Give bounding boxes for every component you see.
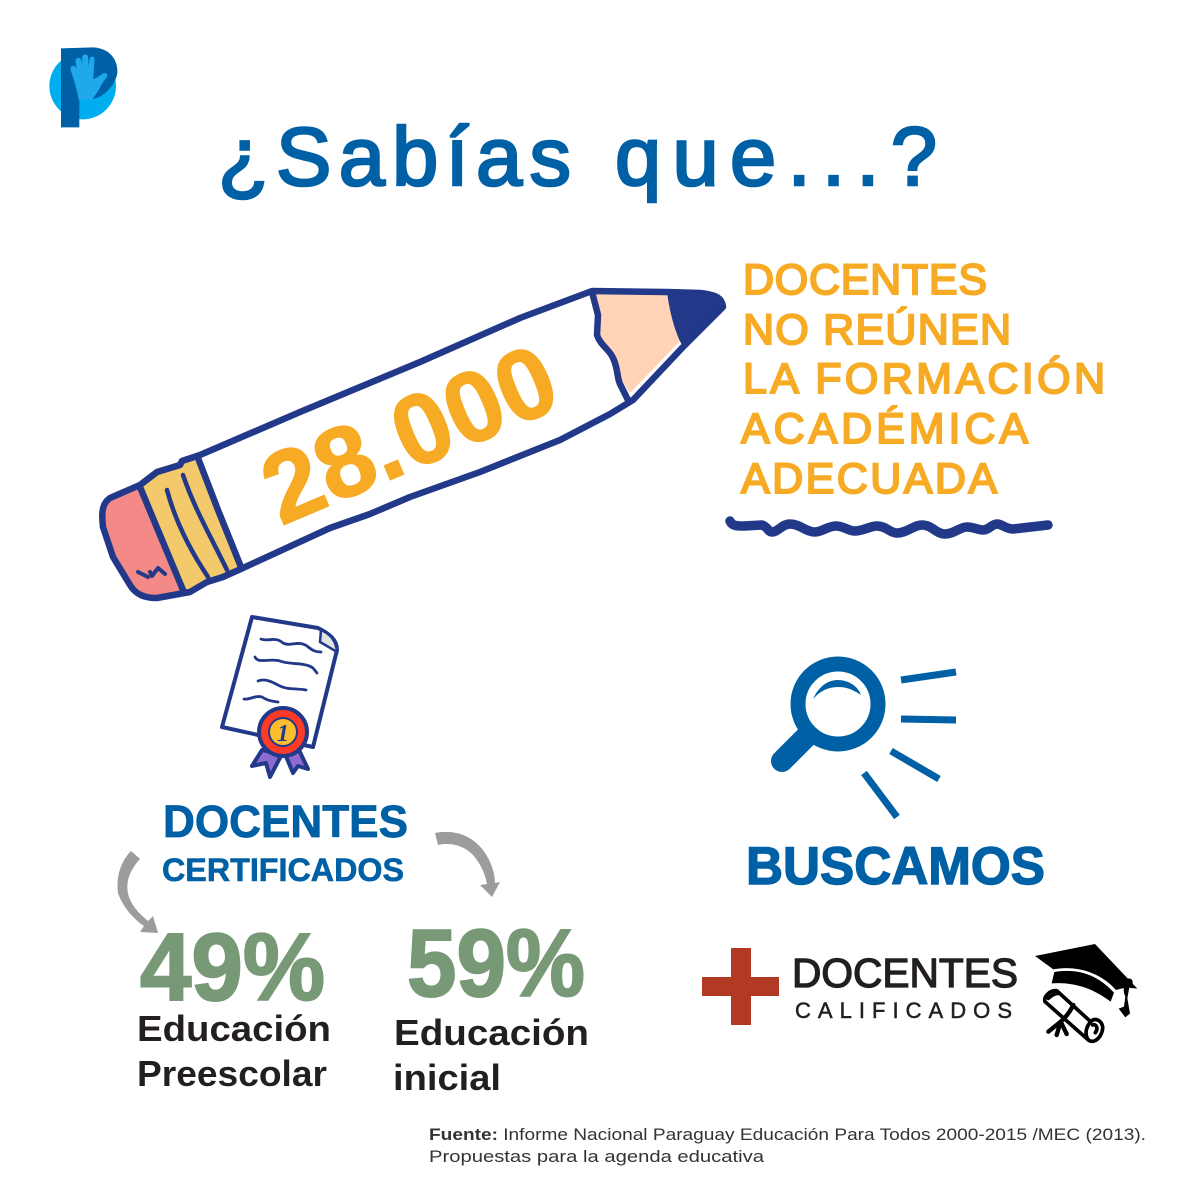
- icon: red plus: [702, 948, 779, 1025]
- pencil lead: [667, 291, 723, 347]
- heading: docentes no reúnen la formación académica adecuada: ACADÉMICA: [741, 405, 1028, 453]
- source note: Propuestas para la agenda educativa: [429, 1148, 765, 1166]
- cap: [1035, 944, 1137, 990]
- metal ferrule: [140, 458, 241, 592]
- pencil outline: [102, 291, 723, 598]
- arrow: to 49%: [118, 851, 158, 933]
- heading: docentes no reúnen la formación académica adecuada: LA FORMACIÓN: [743, 355, 1105, 403]
- heading: docentes certificados: [162, 796, 408, 888]
- wavy underline: [730, 521, 1048, 534]
- purple ribbons: [252, 750, 308, 777]
- stat: 59% educación inicial: inicial: [393, 1057, 501, 1098]
- source note: Fuente: Informe Nacional Paraguay Educación Para Todos 2000-2015 /MEC (2013).: [429, 1126, 1146, 1144]
- icon: certificate with medal: [222, 617, 337, 777]
- certificate page: [222, 617, 337, 747]
- logo: P with raised hand: [49, 47, 117, 127]
- pencil body: [198, 292, 633, 568]
- heading: docentes certificados: DOCENTES: [163, 796, 408, 847]
- arrow: to 59%: [435, 832, 500, 897]
- heading: docentes certificados: CERTIFICADOS: [162, 852, 404, 888]
- stat: 59% educación inicial: Educación: [394, 1012, 589, 1053]
- title: ¿Sabías: [218, 110, 571, 203]
- stat: 49% educación preescolar: Preescolar: [137, 1053, 327, 1094]
- title: que...?: [615, 110, 937, 203]
- diploma: [1045, 991, 1103, 1041]
- heading: docentes no reúnen la formación académica adecuada: DOCENTES: [743, 256, 987, 304]
- heading: docentes calificados: DOCENTES: [792, 950, 1018, 996]
- heading: docentes no reúnen la formación académica adecuada: NO REÚNEN: [743, 306, 1011, 354]
- title: [218, 110, 937, 203]
- stat: 49% educación preescolar: [137, 914, 331, 1094]
- source note: [429, 1126, 1146, 1166]
- medal: [259, 708, 307, 756]
- stat: 59% educación inicial: [393, 910, 589, 1098]
- eraser: [102, 486, 185, 598]
- 28.000 number: 28.000: [246, 323, 573, 546]
- heading: docentes calificados: [792, 950, 1018, 1023]
- heading: docentes no reúnen la formación académica adecuada: ADECUADA: [741, 455, 997, 503]
- icon: graduation cap and diploma: [1035, 944, 1137, 1041]
- icon: certificate with medal: 1: [277, 721, 289, 747]
- stat: 59% educación inicial: 59%: [407, 910, 585, 1017]
- stat: 49% educación preescolar: 49%: [140, 914, 325, 1021]
- tassel: [1119, 978, 1133, 1017]
- sharpened wood: [592, 293, 683, 393]
- page fold: [320, 630, 337, 652]
- pencil illustration with 28.000: [102, 291, 723, 598]
- heading: buscamos: BUSCAMOS: [746, 837, 1045, 896]
- stat: 49% educación preescolar: Educación: [137, 1008, 331, 1049]
- icon: magnifying glass with rays: [782, 664, 956, 817]
- wood edge and ferrule lines: [138, 292, 629, 590]
- heading: docentes calificados: CALIFICADOS: [795, 998, 1012, 1023]
- heading: docentes no reúnen la formación académica adecuada: [741, 256, 1105, 503]
- written lines: [244, 639, 321, 702]
